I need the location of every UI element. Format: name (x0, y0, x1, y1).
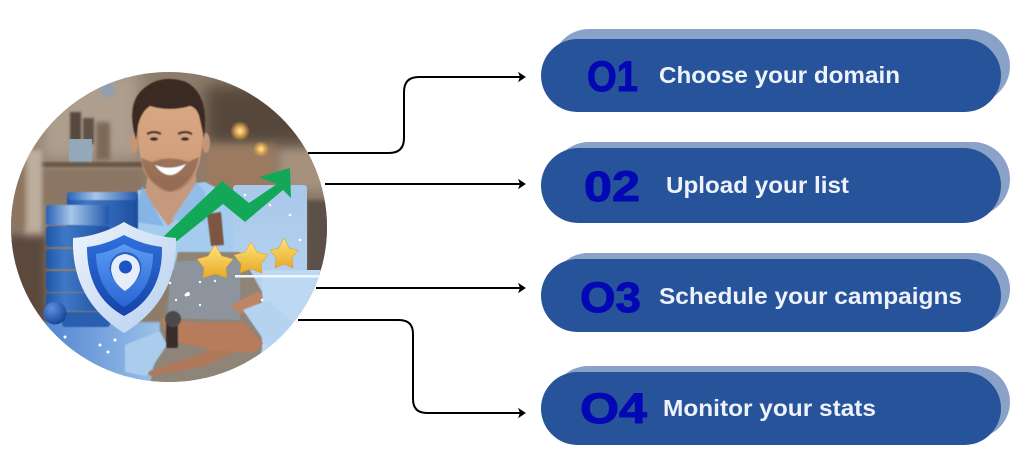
sparkles (64, 194, 320, 354)
connector arrow 4 (298, 320, 525, 417)
number 02: 02 (584, 163, 640, 211)
photo circle: man with security and growth icons (11, 72, 327, 382)
number 01: O1 (587, 53, 638, 101)
icon: shield with location pin (73, 222, 176, 333)
lower blue glow floor (40, 322, 160, 385)
label: monitor your stats: Monitor your stats (663, 395, 876, 421)
step 1 pill (541, 29, 1010, 112)
label: choose your domain: Choose your domain (659, 62, 900, 88)
label: schedule your campaigns: Schedule your campaigns (659, 283, 962, 309)
step 2 pill (541, 142, 1010, 223)
man: head and hair (130, 79, 210, 192)
man: apron (150, 212, 262, 385)
icon: ball (44, 302, 66, 324)
step 3 pill (541, 253, 1010, 332)
label: upload your list: Upload your list (666, 172, 849, 198)
connector arrow 1 (308, 73, 525, 153)
glass panel (233, 185, 322, 355)
icon: three gold stars (197, 238, 298, 278)
man: crossed arms and watch (125, 291, 292, 376)
blurred cafe background (11, 72, 327, 382)
connector arrow 3 (316, 284, 525, 292)
icon: green growth arrow (162, 168, 291, 241)
number 03: O3 (580, 274, 641, 322)
connector arrow 2 (325, 180, 525, 188)
number 04: O4 (580, 385, 647, 433)
man: shirt and neck (137, 172, 233, 270)
icon: database stack (46, 192, 138, 327)
step 4 pill (541, 366, 1010, 445)
